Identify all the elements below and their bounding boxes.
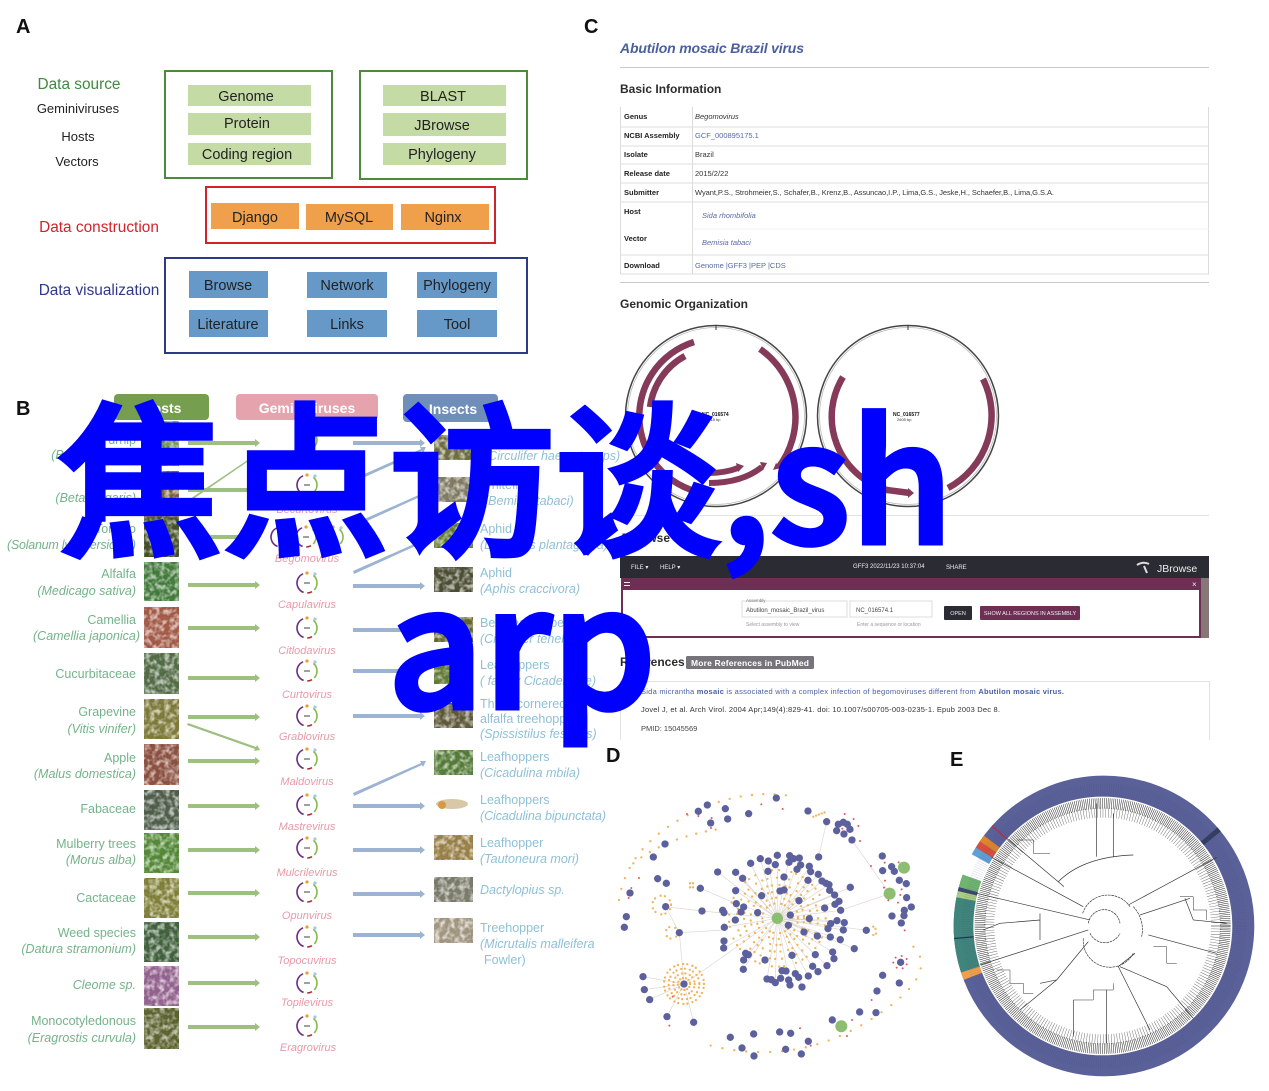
host labels [7,433,140,1045]
host photos [144,421,179,1049]
insect photos [434,435,473,943]
host labels: (Morus alba) [66,853,136,867]
host to virus arrows [187,439,260,1031]
reference entry: Jovel J, et al. Arch Virol. 2004 Apr;149(4):829-41. doi: 10.1007/s00705-003-0235-1. Epub 2003 Dec 8. [641,705,1000,714]
panel D: network graph [619,794,921,1056]
basic information table: Wyant,P.S., Strohmeier,S., Schafer,B., Krenz,B., Assuncao,I.P., Lima,G.S., Jeske,H., Schaefer,B., Lima,G.S.A. [695,188,1054,197]
host labels: Alfalfa [101,567,136,581]
reference entry: Sida micrantha mosaic is associated with a complex infection of begomoviruses different from Abutilon mosaic virus. [641,687,1064,696]
JBrowse screenshot: SHOW ALL REGIONS IN ASSEMBLY [984,611,1076,617]
insect labels: Three-cornered [480,697,566,711]
data visualization box: Network [320,278,374,294]
host labels: Tomato [95,522,136,536]
virus to insect arrows [353,439,426,939]
host labels: (Malus domestica) [34,767,136,781]
basic information heading: Basic Information [620,82,721,96]
host labels: (Camellia japonica) [33,629,140,643]
host labels: Fabaceae [80,802,136,816]
host labels: Apple [104,751,136,765]
insect labels: (Cicadulina bipunctata) [480,809,606,823]
host labels: Grapevine [78,705,136,719]
JBrowse screenshot: HELP ▾ [660,565,680,571]
host labels: (Solanum lycopersicum) [7,538,136,552]
references heading: References [620,655,685,669]
insect labels: Leafhopper [480,433,543,447]
insect labels: (Spissistilus festinus) [480,727,597,741]
tree interior [973,797,1232,1055]
basic information table: Isolate [624,150,648,159]
data visualization box: Links [330,317,364,333]
insect labels: Fowler) [484,953,526,967]
virus genus labels: Becurtovirus [276,504,338,516]
data source box left [165,71,332,178]
data source box right: JBrowse [414,118,470,134]
virus genus labels: Topocuvirus [278,955,337,967]
hub leaf dots [619,794,921,1052]
insect labels: Dactylopius sp. [480,883,565,897]
label E: E [950,749,963,771]
basic information table: Vector [624,234,647,243]
data source labels: Geminiviruses [37,101,120,116]
host labels: (Brassica rapa) [51,448,136,462]
insect labels: Leafhoppers [480,658,550,672]
label A: A [16,16,30,38]
insect labels [480,433,620,967]
data visualization box: Phylogeny [423,278,492,294]
panel A: architecture diagram [37,71,527,353]
basic information table: Submitter [624,188,659,197]
insect labels: Aphid [480,522,512,536]
data construction box [206,187,495,243]
virus genus labels: Eragrovirus [280,1042,337,1054]
data construction box: Django [232,210,278,226]
genome map DNA-A: NC_016574 [702,412,729,418]
JBrowse screenshot: NC_016574.1 [856,608,894,614]
insect labels: ( family Cicadellidae) [480,674,596,688]
host labels: (Medicago sativa) [37,584,136,598]
data source box right [360,71,527,179]
host labels: (Vitis vinifer) [67,722,136,736]
virus genus labels: Capulavirus [278,599,337,611]
column headers: Geminiviruses [259,400,355,416]
insect labels: (Circulifer haematoceps) [484,449,620,463]
data source box left: Genome [218,89,274,105]
data visualization box [165,258,527,353]
insect labels: Aphid [480,566,512,580]
data source labels [37,76,120,169]
panel B: host-virus-insect relationships [7,394,620,1054]
host labels: Cactaceae [76,891,136,905]
data visualization box: Browse [204,278,252,294]
host labels: Cleome sp. [73,978,136,992]
reference entry: PMID: 15045569 [641,724,697,733]
data visualization label: Data visualization [39,282,159,299]
column headers: Insects [429,401,477,417]
JBrowse screenshot [620,556,1209,638]
virus genus labels: Grablovirus [279,731,336,743]
genome map DNA-B: 2605 bp [897,417,912,422]
host labels: Weed species [58,926,136,940]
label D: D [606,745,620,767]
more references button: More References in PubMed [691,658,809,668]
JBrowse screenshot: × [1192,580,1197,589]
insect labels: (Tautoneura mori) [480,852,579,866]
insect labels: Treehopper [480,921,544,935]
basic information table: Host [624,207,641,216]
virus genus labels: Citlodavirus [278,645,336,657]
basic information table [620,107,1209,274]
host labels: (Beta vulgaris) [55,491,136,505]
basic information table: Sida rhombifolia [702,211,756,220]
virus genus labels: Mastrevirus [279,821,336,833]
genome map DNA-A [626,325,806,506]
data source labels: Vectors [55,154,99,169]
JBrowse heading: JBrowse [620,531,670,545]
host labels: Turnip [101,433,136,447]
column headers [114,394,498,422]
insect labels: (Cicadulina mbila) [480,766,580,780]
data source box right: Phylogeny [408,147,477,163]
host labels: Beet [110,474,137,488]
label B: B [16,398,30,420]
protein nodes [624,798,911,1056]
insect labels: Beet leafhopper [480,616,568,630]
column headers: Hosts [143,400,182,416]
label C: C [584,16,598,38]
basic information table: Brazil [695,150,714,159]
basic information table: Genome |GFF3 |PEP |CDS [695,261,786,270]
host labels: (Datura stramonium) [21,942,136,956]
insect labels: alfalfa treehopper [480,712,577,726]
data visualization box: Literature [197,317,259,333]
genome map DNA-B [818,325,998,506]
virus genus labels: Topilevirus [281,997,334,1009]
red and green small nodes [629,804,907,1046]
virus genus labels: Turncurtovirus [272,457,342,469]
host labels: (Eragrostis curvula) [28,1031,136,1045]
JBrowse screenshot: Enter a sequence or location [857,622,921,628]
JBrowse screenshot: JBrowse [1157,563,1197,575]
virus genus labels: Maldovirus [280,776,334,788]
basic information table: Bemisia tabaci [702,238,751,247]
insect labels: Leafhoppers [480,793,550,807]
data visualization box: Tool [444,317,470,333]
genome map DNA-A: 2618 bp [706,417,721,422]
insect labels: (Circulifer tenellus) [480,632,584,646]
insect labels: Leafhoppers [480,750,550,764]
data source labels: Data source [38,76,120,93]
virus title: Abutilon mosaic Brazil virus [619,40,804,56]
JBrowse screenshot: SHARE [946,565,967,571]
JBrowse screenshot: OPEN [950,611,966,617]
JBrowse screenshot: GFF3 2022/11/23 10:37:04 [853,564,925,570]
insect labels: Leafhopper [480,836,543,850]
genome map DNA-B: NC_016577 [893,412,920,418]
JBrowse screenshot: Abutilon_mosaic_Brazil_virus [746,608,824,614]
host labels: Monocotyledonous [31,1014,136,1028]
insect labels: (Bemisia tabaci) [484,494,574,508]
virus genome icons [267,426,347,1040]
reference entry [620,681,1210,740]
whitefly-like pale insect photo [436,799,468,809]
host nodes [772,862,910,1032]
insect labels: Whitefly [480,478,525,492]
virus genus labels [272,457,342,1054]
insect labels: (Micrutalis malleifera [480,937,595,951]
JBrowse screenshot: Select assembly to view [746,622,800,628]
insect labels: (Aphis craccivora) [480,582,580,596]
panel E: circular phylogenetic tree [907,729,1269,1091]
data construction box: MySQL [325,210,373,226]
panel C: virus detail page [619,40,1210,740]
basic information table: Genus [624,112,647,121]
data source labels: Hosts [61,129,95,144]
watermark: arp [388,515,656,756]
basic information table: Release date [624,169,670,178]
clade colour ring [965,787,1243,1065]
basic information table: GCF_000895175.1 [695,131,759,140]
virus genus labels: Begomovirus [275,553,340,565]
data source box right: BLAST [420,89,466,105]
host labels: Camellia [87,613,136,627]
data construction label: Data construction [39,219,159,236]
virus genus labels: Mulcrilevirus [276,867,338,879]
JBrowse screenshot: FILE ▾ [631,565,648,571]
network edges [643,822,890,1022]
basic information table: NCBI Assembly [624,131,680,140]
genomic organization heading: Genomic Organization [620,297,748,311]
data source box left: Protein [224,116,270,132]
data source box left: Coding region [202,147,292,163]
tree branches [977,803,1227,1043]
data construction box: Nginx [424,210,462,226]
insect labels: (Dysaphis plantaginea) [480,538,608,552]
JBrowse screenshot: Assembly [746,598,766,603]
host labels: Mulberry trees [56,837,136,851]
watermark [57,350,953,756]
host labels: Cucurbitaceae [55,667,136,681]
virus genus labels: Curtovirus [282,689,333,701]
basic information table: Download [624,261,660,270]
basic information table: 2015/2/22 [695,169,728,178]
virus genus labels: Opunvirus [282,910,333,922]
basic information table: Begomovirus [695,112,739,121]
watermark: 焦点访谈,sh [57,350,953,591]
